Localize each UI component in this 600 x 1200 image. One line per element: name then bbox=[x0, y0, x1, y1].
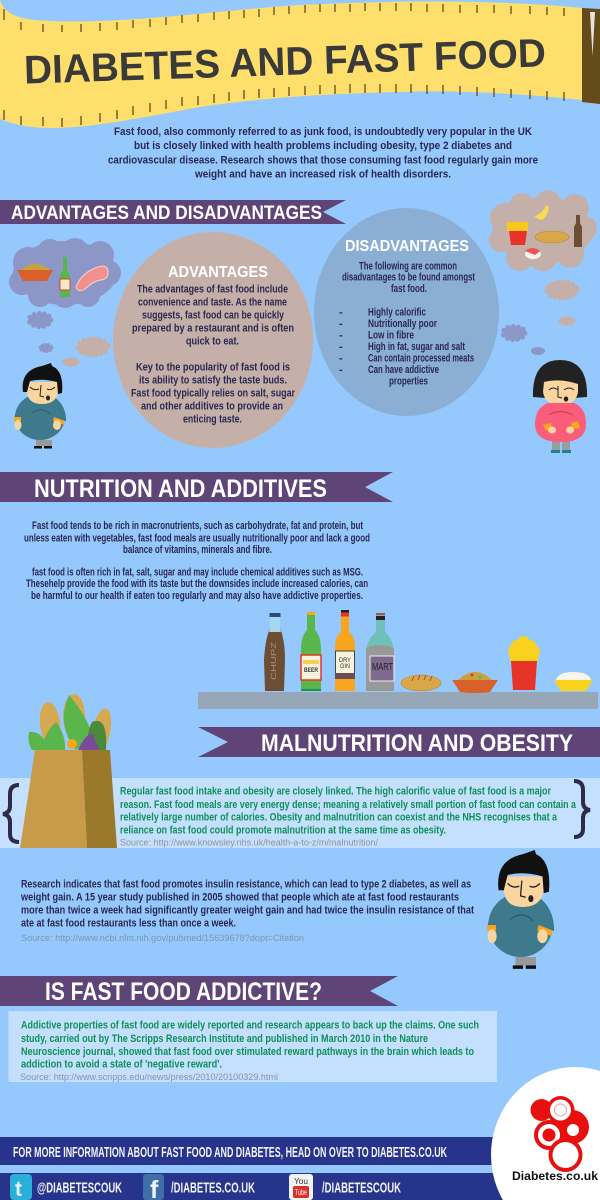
panel: advantages circle: enticing taste. bbox=[183, 414, 242, 426]
panel: disadvantages circle: Highly calorific bbox=[368, 306, 426, 318]
panel: advantages circle: Key to the popularity of fast food is bbox=[136, 362, 290, 374]
bottle: cola: CHUPZ bbox=[271, 641, 278, 680]
nutrition text: balance of vitamins, minerals and fibre. bbox=[123, 544, 272, 556]
research text: weight gain. A 15 year study published in 2005 showed that people which ate at fast food restaurants bbox=[20, 892, 459, 904]
bottle: gin: DRY bbox=[339, 658, 351, 664]
panel: disadvantages circle: - bbox=[339, 318, 343, 330]
panel: disadvantages circle: Can have addictive bbox=[368, 364, 439, 376]
panel: disadvantages circle: Nutritionally poor bbox=[368, 318, 438, 330]
intro text: but is closely linked with health problems including obesity, type 2 diabetes and bbox=[134, 140, 512, 152]
research text: Source: http://www.ncbi.nlm.nih.gov/pubmed/15639678?dopt=Citation bbox=[21, 933, 304, 944]
icon: twitter bbox=[10, 1174, 32, 1200]
panel: disadvantages circle: fast food. bbox=[391, 283, 427, 295]
thought cloud with bowl, bottle and meat bbox=[9, 238, 121, 308]
panel: advantages circle: suggests, fast food can be quickly bbox=[142, 310, 285, 322]
footer call to action band bbox=[0, 1137, 600, 1165]
title banner: measuring tape bbox=[0, 0, 600, 128]
research text bbox=[20, 878, 474, 944]
character: woman thinking bbox=[533, 360, 587, 453]
panel: addiction text box: Neuroscience journal, showed that fast food over stimulated reward pathways in the brain which leads to bbox=[21, 1046, 474, 1058]
icon: grocery bag bbox=[20, 694, 117, 848]
youtube handle: /DIABETESCOUK bbox=[322, 1180, 401, 1196]
panel: disadvantages circle: Low in fibre bbox=[368, 330, 414, 342]
section heading: advantages and disadvantages: ADVANTAGES AND DISADVANTAGES bbox=[11, 203, 322, 224]
bottle: martini bbox=[366, 613, 394, 691]
panel: disadvantages circle: properties bbox=[389, 376, 428, 388]
logo: diabetes.co.uk: Diabetes.co.uk bbox=[512, 1169, 598, 1183]
brace right bbox=[574, 781, 590, 837]
bottle: cola bbox=[264, 613, 285, 691]
nutrition text: Thesehelp provide the food with its taste but the downsides include increased calories, can bbox=[26, 578, 368, 590]
bottle: martini: MART bbox=[372, 662, 393, 673]
intro text: weight and have an increased risk of health disorders. bbox=[194, 168, 451, 180]
nutrition text: fast food is often rich in fat, salt, sugar and may include chemical additives such as MSG. bbox=[32, 566, 363, 578]
panel: advantages circle: Fast food typically relies on salt, sugar bbox=[131, 388, 296, 400]
nutrition text bbox=[24, 520, 370, 602]
panel: addiction text box: study, carried out by The Scripps Research Institute and published in March 2010 in the Nature bbox=[21, 1033, 428, 1045]
intro text bbox=[108, 126, 538, 180]
panel: malnutrition text box: reliance on fast food could promote malnutrition at the same time as obesity. bbox=[120, 824, 446, 836]
research text: more than twice a week had significantly greater weight gain and had twice the insulin resistance of that bbox=[21, 904, 474, 916]
brace left bbox=[3, 785, 19, 842]
bottle: gin bbox=[335, 610, 355, 691]
footer social band bbox=[0, 1173, 600, 1200]
facebook handle: /DIABETES.CO.UK bbox=[171, 1180, 255, 1196]
nutrition text: be harmful to our health if eaten too regularly and may also have addictive properties. bbox=[31, 590, 363, 602]
twitter handle: @DIABETESCOUK bbox=[37, 1180, 122, 1196]
bottle: beer: BEER bbox=[304, 668, 319, 674]
icon: youtube: You bbox=[294, 1177, 308, 1186]
icon: youtube: Tube bbox=[295, 1188, 307, 1197]
tape end cap bbox=[582, 8, 600, 104]
thought cloud with fries, banana, bread, bottle and sushi bbox=[489, 190, 597, 271]
panel: disadvantages circle: - bbox=[339, 364, 343, 376]
research text: ate at fast food restaurants less than once a week. bbox=[21, 918, 236, 930]
section heading: is fast food addictive: IS FAST FOOD ADDICTIVE? bbox=[45, 978, 322, 1006]
character: man thinking bbox=[14, 363, 66, 448]
nutrition text: Fast food tends to be rich in macronutrients, such as carbohydrate, fat and protein, but bbox=[32, 520, 363, 532]
character: man bbox=[487, 850, 554, 969]
panel: advantages circle: prepared by a restaurant and is often bbox=[132, 322, 294, 334]
intro text: cardiovascular disease. Research shows that those consuming fast food regularly gain more bbox=[108, 154, 538, 166]
panel: advantages circle: ADVANTAGES bbox=[168, 264, 268, 281]
rice bowl bbox=[554, 672, 593, 691]
main title: DIABETES AND FAST FOOD bbox=[23, 31, 547, 93]
intro text: Fast food, also commonly referred to as junk food, is undoubtedly very popular in the UK bbox=[114, 126, 532, 138]
small thought bubbles left bbox=[29, 314, 108, 366]
bread bbox=[401, 675, 441, 691]
panel: addiction text box: Source: http://www.scripps.edu/news/press/2010/20100329.html bbox=[20, 1072, 278, 1083]
panel: addiction text box: Addictive properties of fast food are widely reported and research appears to back up the claims. One such bbox=[21, 1020, 479, 1032]
panel: addiction text box bbox=[8, 1011, 497, 1083]
panel: advantages circle: quick to eat. bbox=[186, 336, 239, 348]
panel: disadvantages circle bbox=[314, 208, 499, 416]
small thought bubbles right bbox=[503, 282, 577, 355]
panel: advantages circle: The advantages of fast food include bbox=[137, 284, 288, 296]
panel: disadvantages circle: - bbox=[339, 341, 343, 353]
panel: disadvantages circle: Can contain processed meats bbox=[368, 352, 474, 364]
panel: disadvantages circle: disadvantages to be found amongst bbox=[342, 272, 475, 284]
panel: malnutrition text box bbox=[0, 778, 600, 848]
icon: youtube bbox=[289, 1174, 313, 1200]
panel: addiction text box: addiction to avoid a state of 'negative reward'. bbox=[21, 1058, 222, 1070]
bottle: beer bbox=[301, 612, 321, 691]
panel: disadvantages circle: - bbox=[339, 306, 343, 318]
panel: disadvantages circle: The following are common bbox=[359, 260, 457, 272]
panel: disadvantages circle: DISADVANTAGES bbox=[345, 238, 469, 255]
fries bbox=[508, 636, 540, 690]
panel: advantages circle: its ability to satisfy the taste buds. bbox=[139, 374, 287, 386]
panel: disadvantages circle: High in fat, sugar and salt bbox=[368, 341, 465, 353]
shelf bbox=[198, 692, 598, 709]
panel: disadvantages circle: - bbox=[339, 330, 343, 342]
panel: disadvantages circle: - bbox=[339, 352, 343, 364]
logo: diabetes.co.uk bbox=[491, 1067, 600, 1200]
panel: advantages circle: and other additives to provide an bbox=[141, 400, 283, 412]
panel: advantages circle bbox=[113, 232, 313, 448]
panel: malnutrition text box: Source: http://www.knowsley.nhs.uk/health-a-to-z/m/malnutrition/ bbox=[120, 838, 378, 848]
nutrition text: unless eaten with vegetables, fast food meals are usually nutritionally poor and lack a good bbox=[24, 532, 370, 544]
bowl of noodles bbox=[452, 672, 498, 693]
bottle: gin: GIN bbox=[340, 664, 350, 670]
research text: Research indicates that fast food promotes insulin resistance, which can lead to type 2 diabetes, as well as bbox=[21, 878, 471, 890]
icon: facebook bbox=[143, 1174, 164, 1200]
section heading: nutrition and additives: NUTRITION AND ADDITIVES bbox=[34, 475, 327, 503]
food and drink shelf items bbox=[264, 610, 593, 693]
panel: advantages circle: convenience and taste. As the name bbox=[138, 296, 287, 308]
